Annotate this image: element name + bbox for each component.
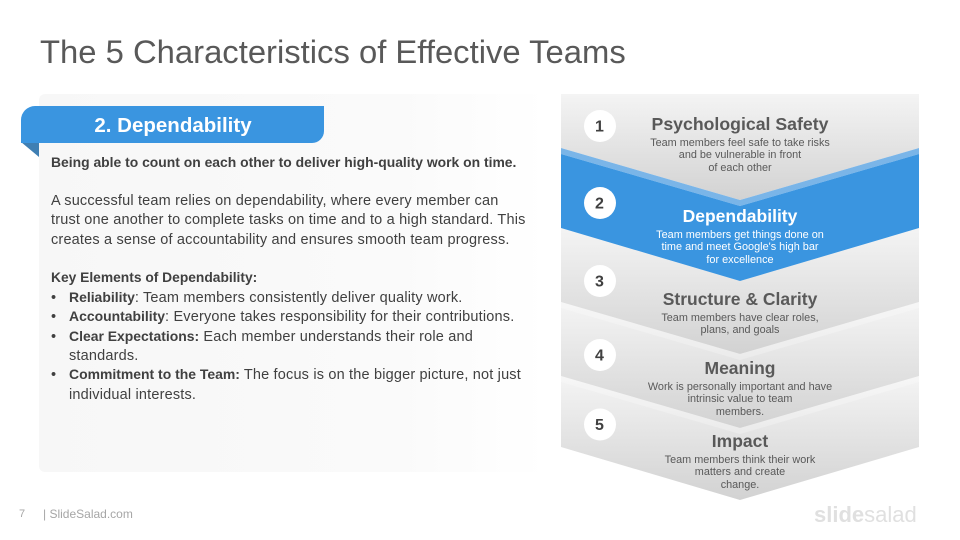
number badge 1 bbox=[584, 110, 616, 142]
chevron 1: Psychological Safety: of each other bbox=[708, 162, 772, 174]
text block: description: • bbox=[51, 329, 56, 345]
text block: description: • bbox=[51, 367, 56, 383]
number badge 5: 5 bbox=[595, 417, 604, 434]
text block: description: individual interests. bbox=[69, 387, 196, 403]
number badge 3 bbox=[584, 265, 616, 297]
chevron 3: Structure & Clarity: Team members have clear roles, bbox=[661, 312, 819, 324]
footer source: | SlideSalad.com bbox=[43, 507, 133, 521]
chevron 3: Structure & Clarity bbox=[561, 228, 919, 354]
text block: description bbox=[51, 154, 526, 403]
chevron 2: Dependability (highlighted): for excellence bbox=[706, 254, 774, 266]
page number: 7 bbox=[19, 508, 25, 520]
number badge 5 bbox=[584, 408, 616, 440]
chevron 1: Psychological Safety: Psychological Safety bbox=[652, 114, 829, 134]
chevron 5: Impact: Team members think their work bbox=[665, 454, 816, 466]
chevron 4: Meaning: intrinsic value to team bbox=[688, 393, 792, 405]
chevron 5: Impact: change. bbox=[721, 479, 759, 491]
text block: description: Key Elements of Dependability: bbox=[51, 270, 257, 285]
text block: description: A successful team relies on dependability, where every member can bbox=[51, 193, 498, 209]
number badge 2: 2 bbox=[595, 196, 604, 212]
chevron 4: Meaning: Meaning bbox=[705, 358, 775, 378]
text block: description: standards. bbox=[69, 348, 139, 364]
chevron 3: Structure & Clarity: Structure & Clarity bbox=[663, 289, 818, 309]
chevron 1: Psychological Safety bbox=[561, 94, 919, 200]
text block: description: creates a sense of accountability and ensures smooth team progress. bbox=[51, 232, 510, 248]
number badge 2 bbox=[584, 187, 616, 219]
number badge 1: 1 bbox=[595, 118, 604, 136]
chevron 2: Dependability (highlighted) bbox=[561, 148, 919, 281]
text block: description: Commitment to the Team: The focus is on the bigger picture, not just bbox=[69, 366, 521, 383]
text block: description: Accountability: Everyone takes responsibility for their contributions. bbox=[69, 308, 514, 325]
text block: description: • bbox=[51, 290, 56, 306]
chevron 5: Impact: Impact bbox=[712, 431, 768, 451]
panel: dependability details bbox=[39, 94, 547, 472]
chevron 1: Psychological Safety: Team members feel safe to take risks bbox=[650, 137, 830, 149]
chevron 4: Meaning: Work is personally important and have bbox=[648, 381, 832, 393]
chevron 2: Dependability (highlighted): time and meet Google's high bar bbox=[661, 241, 819, 253]
number badge 4 bbox=[584, 339, 616, 371]
text block: description: Clear Expectations: Each member understands their role and bbox=[69, 328, 473, 345]
chevron 5: Impact: matters and create bbox=[695, 466, 785, 478]
text block: description: Reliability: Team members consistently deliver quality work. bbox=[69, 289, 463, 306]
text block: description: • bbox=[51, 309, 56, 325]
logo: slidesalad: slidesalad bbox=[814, 502, 917, 527]
title: The 5 Characteristics of Effective Teams bbox=[40, 33, 626, 70]
number badge 3: 3 bbox=[595, 274, 604, 290]
chevron 1: Psychological Safety: and be vulnerable in front bbox=[679, 149, 801, 161]
banner: 2. Dependability bbox=[21, 106, 324, 157]
banner: 2. Dependability: 2. Dependability bbox=[94, 114, 252, 137]
chevron 2: Dependability (highlighted): Team members get things done on bbox=[656, 229, 824, 241]
chevron 4: Meaning: members. bbox=[716, 406, 764, 418]
number badge 4: 4 bbox=[595, 348, 604, 364]
chevron 4: Meaning bbox=[561, 302, 919, 428]
chevron 2: Dependability (highlighted): Dependability bbox=[683, 206, 798, 226]
chevron 3: Structure & Clarity: plans, and goals bbox=[701, 324, 780, 336]
text block: description: Being able to count on each other to deliver high-quality work on time. bbox=[51, 154, 516, 170]
text block: description: trust one another to complete tasks on time and to a high standard. This bbox=[51, 212, 526, 228]
chevron 5: Impact bbox=[561, 376, 919, 500]
